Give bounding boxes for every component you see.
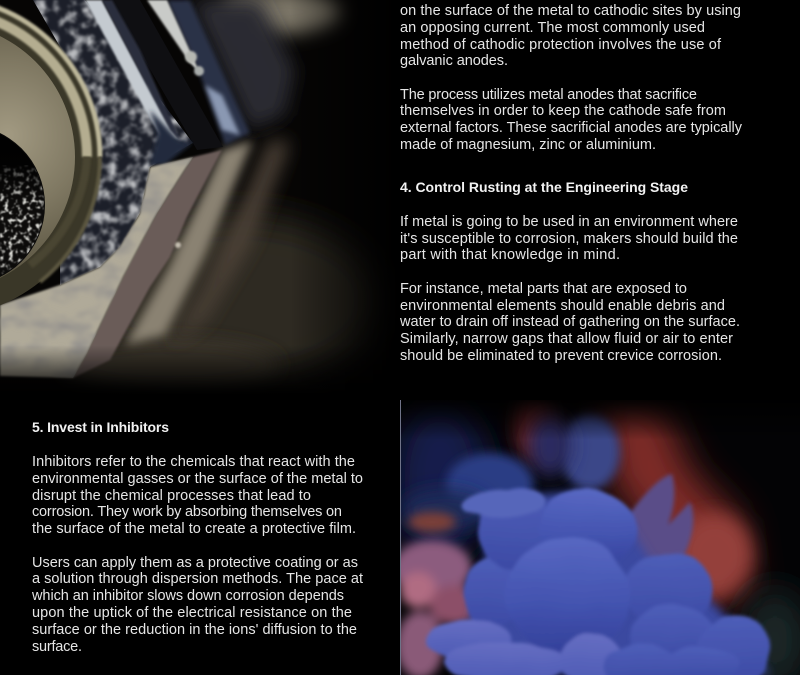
text block: section 4: Similarly, narrow gaps that allow fluid or air to enter xyxy=(400,331,733,347)
text block: section 4 xyxy=(399,214,740,364)
heading: section 4: 4. Control Rusting at the Engineering Stage xyxy=(400,179,688,195)
cloud petals right xyxy=(630,472,696,559)
text block: section 3 continued: themselves in order to keep the cathode safe from xyxy=(400,103,726,119)
cloud pink left xyxy=(401,534,477,675)
text block: section 3 continued: method of cathodic protection involves the use of xyxy=(400,37,722,53)
photo: blue and red ink cloud xyxy=(392,387,800,675)
photo vignette xyxy=(0,348,326,395)
text block: section 4: it's susceptible to corrosion, makers should build the xyxy=(400,231,738,247)
text block: section 5: surface. xyxy=(32,639,82,655)
text block: section 5: upon the uptick of the electrical resistance on the xyxy=(32,605,352,621)
text block: section 3 continued: galvanic anodes. xyxy=(400,53,508,69)
text block: section 3 continued: The process utilizes metal anodes that sacrifice xyxy=(400,87,697,103)
text block: section 4: part with that knowledge in mind. xyxy=(400,247,620,263)
text block: section 5: disrupt the chemical processes that lead to xyxy=(32,488,311,504)
text block: section 3 continued: on the surface of the metal to cathodic sites by using xyxy=(400,3,741,19)
text block: section 5: surface or the reduction in the ions' diffusion to the xyxy=(32,622,357,638)
heading: section 5: 5. Invest in Inhibitors xyxy=(32,419,169,435)
text block: section 3 continued: an opposing current. The most commonly used xyxy=(400,20,705,36)
cloud lobes xyxy=(426,488,771,675)
text block: section 3 continued: made of magnesium, zinc or aluminium. xyxy=(400,137,656,153)
nut bevel xyxy=(73,150,222,378)
text block: section 4: For instance, metal parts that are exposed to xyxy=(400,281,687,297)
text block: section 4: environmental elements should enable debris and xyxy=(400,298,725,314)
photo: corroded metal nut xyxy=(0,0,371,386)
reflection bands beside nut xyxy=(170,140,290,345)
blue reflection xyxy=(167,0,250,145)
text block: section 4: should be eliminated to prevent crevice corrosion. xyxy=(400,348,722,364)
text block: section 5: which an inhibitor slows down corrosion depends xyxy=(31,588,344,604)
nut mottled face xyxy=(33,0,193,285)
text block: section 4: If metal is going to be used in an environment where xyxy=(400,214,738,230)
nut dark band xyxy=(110,0,223,150)
nut inner washer xyxy=(0,0,100,317)
text block: section 5: environmental gasses or the surface of the metal to xyxy=(32,471,363,487)
text block: section 5: Users can apply them as a protective coating or as xyxy=(32,555,358,571)
cloud base mass xyxy=(470,490,770,675)
text block: section 4: water to drain off instead of gathering on the surface. xyxy=(399,314,740,330)
text block: section 5 xyxy=(31,454,363,655)
photo edge line xyxy=(400,400,401,675)
text block: section 5: the surface of the metal to create a protective film. xyxy=(32,521,356,537)
text block: section 5: Inhibitors refer to the chemicals that react with the xyxy=(32,454,355,470)
nut lower light face xyxy=(0,157,193,378)
text block: section 5: a solution through dispersion methods. The pace at xyxy=(32,571,363,587)
nut bore hole xyxy=(0,125,45,285)
text block: section 3 continued xyxy=(400,3,743,153)
text block: section 5: corrosion. They work by absorbing themselves on xyxy=(32,504,342,520)
text block: section 3 continued: external factors. These sacrificial anodes are typically xyxy=(400,120,743,136)
